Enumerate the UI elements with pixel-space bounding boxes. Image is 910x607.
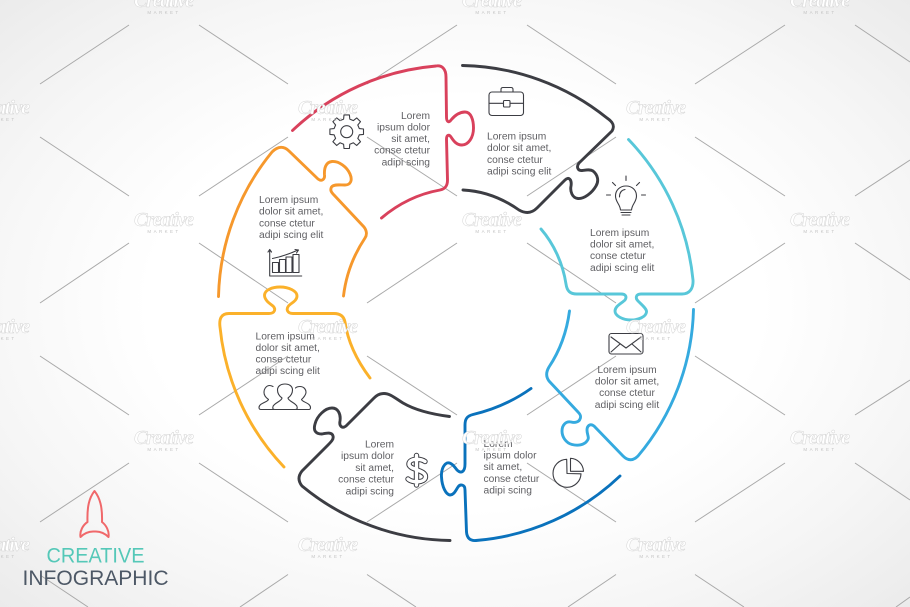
text block: red segment: Lorem [401, 111, 430, 122]
icon: people group [259, 384, 310, 410]
logo: creative infographic [22, 491, 168, 590]
text: Creative [134, 209, 194, 231]
panel: dark top puzzle segment [462, 66, 613, 212]
text: MARKET [147, 10, 181, 15]
panel: dark blue puzzle segment [441, 388, 620, 541]
text block: dark blue segment: ipsum dolor [484, 450, 537, 462]
text: MARKET [475, 229, 509, 234]
panel: red puzzle segment [292, 66, 474, 218]
text: MARKET [311, 117, 345, 122]
text block: dark bottom segment: sit amet, [355, 463, 394, 474]
text block: cyan segment: conse ctetur [590, 251, 646, 262]
text: MARKET [147, 229, 181, 234]
panel: orange puzzle segment [218, 147, 366, 296]
icon: envelope [609, 334, 643, 354]
icon: bar chart [268, 250, 302, 276]
text: MARKET [147, 447, 181, 452]
text block: yellow segment: dolor sit amet, [256, 343, 320, 354]
text: MARKET [803, 447, 837, 452]
text: MARKET [803, 10, 837, 15]
logo text: creative: CREATIVE [46, 544, 144, 568]
text block: dark blue segment: adipi scing [484, 486, 532, 496]
text: Creative [626, 534, 686, 556]
text block: yellow segment: conse ctetur [256, 354, 312, 366]
text block: cyan segment: dolor sit amet, [590, 240, 654, 250]
text block: light blue segment: conse ctetur [599, 388, 655, 399]
text block: dark bottom segment: ipsum dolor [341, 451, 395, 462]
text block: yellow segment: Lorem ipsum [256, 332, 315, 342]
text: MARKET [639, 554, 673, 559]
text block: dark top segment: adipi scing elit [487, 166, 552, 178]
text: MARKET [475, 447, 509, 452]
text: Creative [790, 209, 850, 231]
text block: red segment: ipsum dolor [377, 122, 431, 134]
text block: light blue segment: dolor sit amet, [595, 376, 659, 388]
text: Creative [134, 427, 194, 449]
text block: yellow segment: adipi scing elit [256, 366, 320, 377]
panel: yellow puzzle segment [220, 287, 370, 467]
text: Creative [298, 97, 358, 119]
icon: dollar sign [408, 456, 426, 485]
text block: cyan segment: Lorem ipsum [590, 228, 649, 239]
text: Creative [462, 209, 522, 231]
text block: red segment: sit amet, [391, 134, 430, 145]
text: MARKET [311, 554, 345, 559]
text block: red segment: conse ctetur [374, 146, 431, 157]
text block: dark blue segment: conse ctetur [484, 474, 540, 485]
text: Creative [462, 427, 522, 449]
icon: pie chart [553, 458, 584, 487]
text block: light blue segment: Lorem ipsum [597, 365, 657, 376]
text block: light blue segment: adipi scing elit [595, 400, 659, 411]
text block: dark bottom segment: adipi scing [346, 486, 394, 498]
text block: dark blue segment: Lorem [484, 439, 513, 450]
text block: dark top segment: Lorem ipsum [487, 132, 546, 142]
icon: gear [330, 115, 364, 148]
panel: dark bottom puzzle segment [299, 394, 450, 540]
text block: dark top segment: dolor sit amet, [487, 143, 551, 154]
text block: orange segment: dolor sit amet, [259, 207, 323, 218]
text: MARKET [639, 117, 673, 122]
text block: orange segment: adipi scing elit [259, 230, 324, 241]
text: Creative [298, 534, 358, 556]
text: MARKET [475, 10, 509, 15]
panel: cyan puzzle segment [541, 140, 693, 320]
text: Creative [298, 316, 358, 338]
logo text: infographic: INFOGRAPHIC [22, 567, 168, 590]
text: Creative [790, 427, 850, 449]
text block: cyan segment: adipi scing elit [590, 263, 655, 274]
text block: orange segment: conse ctetur [259, 218, 315, 229]
text block: dark bottom segment: conse ctetur [338, 474, 395, 486]
text: MARKET [311, 336, 345, 341]
text block: dark blue segment: sit amet, [484, 462, 522, 473]
text: Creative [626, 97, 686, 119]
icon: briefcase [489, 88, 524, 116]
text: MARKET [639, 336, 673, 341]
panel: light blue puzzle segment [547, 310, 694, 460]
text block: red segment: adipi scing [382, 157, 430, 168]
icon: rocket [80, 491, 109, 537]
text block: dark top segment: conse ctetur [487, 155, 543, 166]
text block: orange segment: Lorem ipsum [259, 195, 318, 206]
text: Creative [626, 316, 686, 338]
text block: dark bottom segment: Lorem [365, 440, 394, 450]
text: MARKET [803, 229, 837, 234]
icon: light bulb [606, 176, 646, 215]
